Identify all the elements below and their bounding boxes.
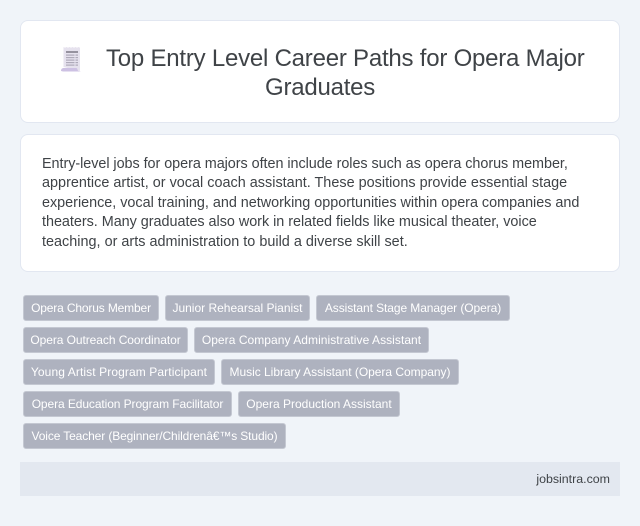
- text block: description: experience, vocal training, and networking opportunities within opera companies and: [42, 195, 579, 211]
- tag list: career paths: [23, 295, 510, 449]
- tag: [316, 295, 510, 321]
- tag: Junior Rehearsal Pianist: [172, 301, 303, 315]
- text block: description: teaching, or arts administration to build a diverse skill set.: [42, 234, 408, 250]
- text block: description: Entry-level jobs for opera majors often include roles such as opera chorus member,: [42, 156, 568, 172]
- tag: Opera Education Program Facilitator: [32, 397, 223, 411]
- panel: title header: [20, 20, 620, 123]
- tag: [221, 359, 459, 385]
- tag: Young Artist Program Participant: [31, 365, 207, 379]
- text block: description: theaters. Many graduates also work in related fields like musical theater, voice: [42, 214, 537, 230]
- tag: Opera Chorus Member: [31, 301, 151, 315]
- tag: [23, 423, 286, 449]
- title: [106, 45, 585, 101]
- icon: document scroll: [61, 47, 80, 72]
- title: Graduates: [265, 74, 375, 101]
- text block: description: [42, 156, 579, 250]
- footer bar: [20, 462, 620, 496]
- tag: Opera Company Administrative Assistant: [202, 333, 421, 347]
- tag: [194, 327, 429, 353]
- tag: [238, 391, 400, 417]
- tag: Opera Production Assistant: [246, 397, 392, 411]
- tag: [23, 295, 159, 321]
- tag: [165, 295, 310, 321]
- panel: description: [20, 134, 620, 272]
- tag: [23, 359, 215, 385]
- text block: description: apprentice artist, or vocal coach assistant. These positions provide essential stage: [42, 175, 567, 191]
- footer source: jobsintra.com: [536, 472, 610, 486]
- tag: [23, 391, 232, 417]
- tag: Assistant Stage Manager (Opera): [325, 301, 501, 315]
- title: Top Entry Level Career Paths for Opera Major: [106, 45, 585, 72]
- tag: Music Library Assistant (Opera Company): [230, 365, 450, 379]
- tag: [23, 327, 188, 353]
- tag: Opera Outreach Coordinator: [30, 333, 181, 347]
- tag: Voice Teacher (Beginner/Childrenâ€™s Studio): [32, 429, 277, 443]
